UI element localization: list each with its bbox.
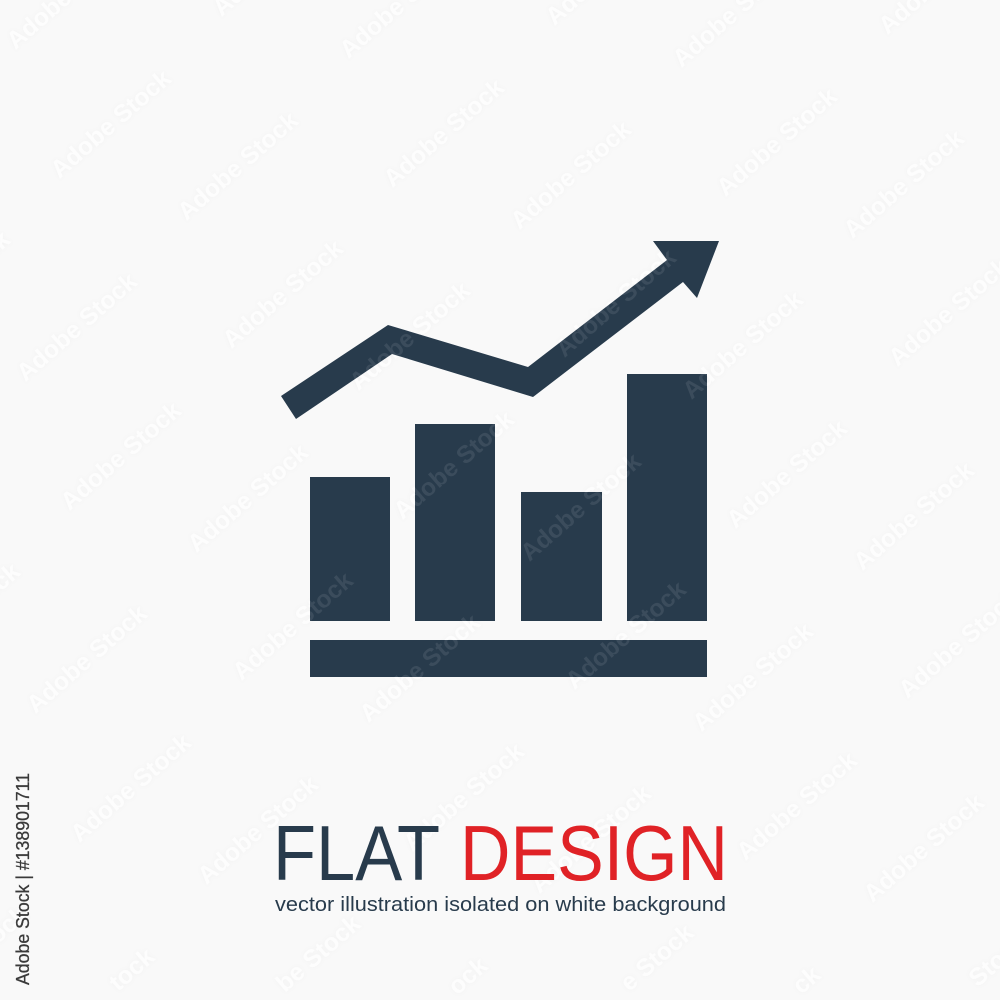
watermark pattern: Adobe Stock — [379, 74, 510, 193]
watermark pattern: be Stock — [271, 910, 366, 998]
watermark pattern: Adobe Stock — [859, 789, 990, 908]
watermark pattern: tock — [104, 943, 160, 997]
watermark pattern: Adobe Stock — [173, 107, 304, 226]
watermark pattern: Adobe Stock — [688, 618, 819, 737]
watermark over icon: Adobe Stock — [228, 567, 359, 686]
watermark over icon: Adobe Stock — [389, 406, 520, 525]
watermark pattern: Adobe Stock — [516, 448, 647, 567]
baseline bar — [310, 640, 707, 677]
watermark pattern: Adobe Stock — [722, 415, 853, 534]
bar 3 — [521, 492, 602, 621]
side stock id label: Adobe Stock | #138901711 — [13, 773, 33, 985]
watermark over icon: Adobe Stock — [218, 235, 349, 354]
watermark pattern: Adobe Stock — [389, 406, 520, 525]
watermark pattern: ock — [443, 952, 493, 1000]
watermark pattern: e Stock — [615, 919, 699, 997]
watermark over icon: Adobe Stock — [516, 448, 647, 567]
bar 4 — [627, 374, 707, 621]
watermark over icon: Adobe Stock — [722, 415, 853, 534]
arrow: trend line — [281, 241, 719, 419]
watermark pattern: Adobe Stock — [561, 576, 692, 695]
watermark pattern: Adobe Stock — [506, 116, 637, 235]
bar 1 — [310, 477, 390, 621]
watermark over icon: Adobe Stock — [345, 277, 476, 396]
watermark pattern: Adobe Stock — [839, 125, 970, 244]
watermark pattern: Adobe Stock — [355, 609, 486, 728]
watermark pattern: Adobe Stock — [183, 439, 314, 558]
title word: design: DESIGN — [460, 809, 728, 897]
title: flat design — [273, 809, 728, 897]
watermark over icon: Adobe Stock — [551, 244, 682, 363]
watermark pattern: Adobe Stock — [345, 277, 476, 396]
watermark pattern: Adobe Stock — [66, 729, 197, 848]
watermark pattern: Adobe Stock — [526, 780, 657, 899]
watermark pattern: Adobe Stock — [193, 771, 324, 890]
title word: flat: FLAT — [273, 809, 440, 897]
watermark over icon: Adobe Stock — [688, 618, 819, 737]
watermark pattern: Adobe Stock — [732, 747, 863, 866]
watermark pattern: Adobe Stock — [218, 235, 349, 354]
watermark pattern: Adobe Stock — [678, 286, 809, 405]
watermark over icon: Adobe Stock — [678, 286, 809, 405]
watermark over icon — [310, 250, 707, 677]
watermark pattern: Adobe Stock — [712, 83, 843, 202]
watermark pattern: ck — [788, 961, 826, 999]
watermark over icon: Adobe Stock — [355, 609, 486, 728]
infographic canvas — [15, 241, 725, 986]
subtitle: vector illustration isolated on white background — [275, 893, 726, 916]
watermark pattern: Adobe Stock — [551, 244, 682, 363]
watermark pattern: Adobe Stock — [849, 457, 980, 576]
watermark over icon: Adobe Stock — [561, 576, 692, 695]
watermark pattern: Adobe Stock — [56, 397, 187, 516]
watermark pattern: Adobe Stock — [22, 600, 153, 719]
watermark pattern: Adobe Stock — [12, 268, 143, 387]
bar 2 — [415, 424, 495, 621]
watermark pattern: Adobe Stock — [228, 567, 359, 686]
watermark pattern: Adobe Stock — [46, 65, 177, 184]
watermark over icon: Adobe Stock — [183, 439, 314, 558]
watermark pattern: Adobe Stock — [399, 738, 530, 857]
icon: rising bar chart — [281, 241, 719, 677]
